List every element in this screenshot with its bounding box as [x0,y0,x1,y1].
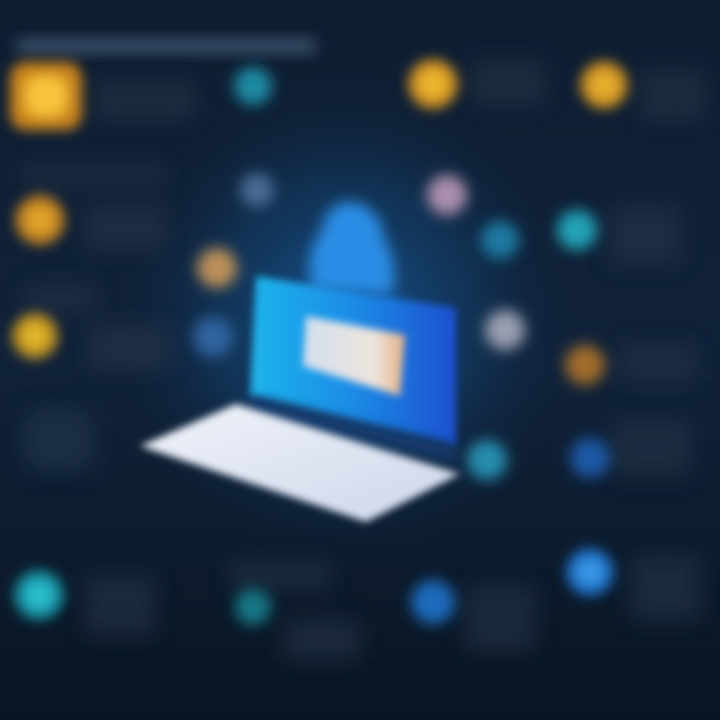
icon: blue beside laptop [193,317,233,357]
laptop keyboard [140,404,460,522]
icon: teal bottom left [14,570,64,620]
icon: teal right of centre [481,221,519,259]
icon: teal right column [557,210,597,250]
icon: pink upper centre [427,175,467,215]
document on screen [303,316,405,396]
icon: yellow top right B [580,61,628,109]
icon: teal near keyboard [467,440,507,480]
icon: yellow top right A [408,59,458,109]
icon: yellow left lower [12,313,58,359]
icon: slate upper centre [240,173,274,207]
central blue glow [110,70,580,570]
icon: teal top centre [234,67,272,105]
icon: orange left upper [15,195,65,245]
icon: blue bottom right [566,548,614,596]
icon: orange beside laptop [197,248,237,288]
icon: orange right column [565,345,605,385]
icon: pale right of laptop [485,310,525,350]
icon: faint dark circle left [27,412,83,468]
icon: blue right column [570,438,610,478]
title [16,38,316,54]
laptop illustration [140,202,460,522]
icon: teal bottom centre [235,589,271,625]
cloud shape above screen [310,202,394,295]
laptop screen [250,276,456,446]
blurred text blocks [20,60,705,660]
screen base shadow [250,396,456,462]
icon: blue bottom centre [411,580,455,624]
icon: yellow square top left [10,62,82,130]
